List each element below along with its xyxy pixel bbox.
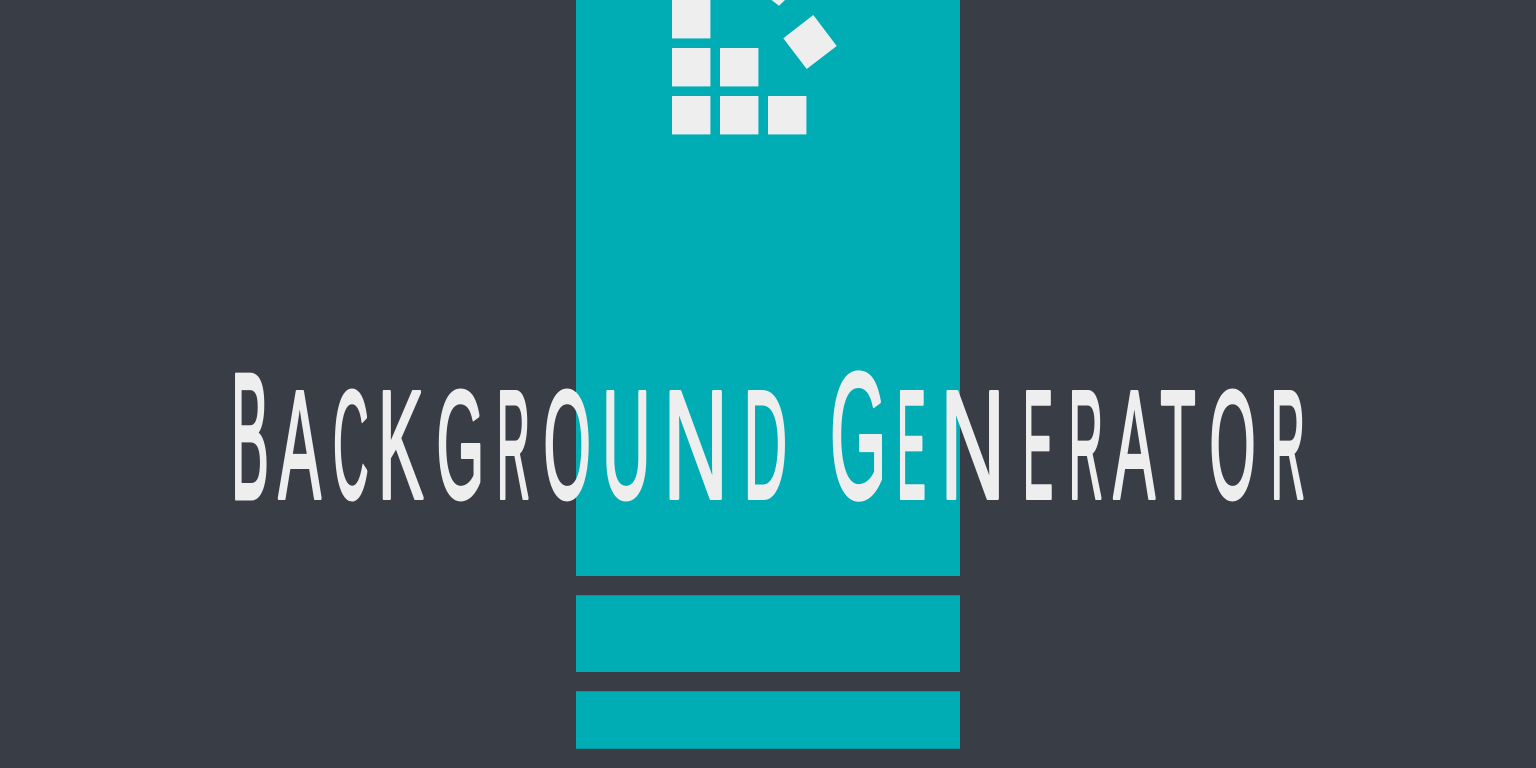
panel: teal column	[576, 0, 960, 749]
title: O	[544, 359, 591, 531]
title: O	[1210, 358, 1256, 531]
title: B	[231, 337, 269, 538]
title: R	[1271, 360, 1305, 532]
title: E	[897, 359, 926, 531]
title: N	[940, 359, 1005, 531]
title: D	[744, 358, 787, 531]
title: N	[663, 359, 728, 531]
title: T	[1160, 359, 1196, 531]
title: R	[497, 360, 530, 532]
title: K	[378, 360, 424, 532]
title: G	[830, 337, 887, 537]
title: G	[436, 359, 484, 531]
title: C	[333, 361, 369, 532]
title: R	[1069, 360, 1103, 532]
icon: falling squares logo	[672, 0, 837, 134]
title: A	[1114, 359, 1155, 531]
title: E	[1023, 360, 1053, 532]
title: A	[278, 358, 321, 531]
title: U	[602, 359, 651, 532]
title	[231, 337, 1305, 538]
